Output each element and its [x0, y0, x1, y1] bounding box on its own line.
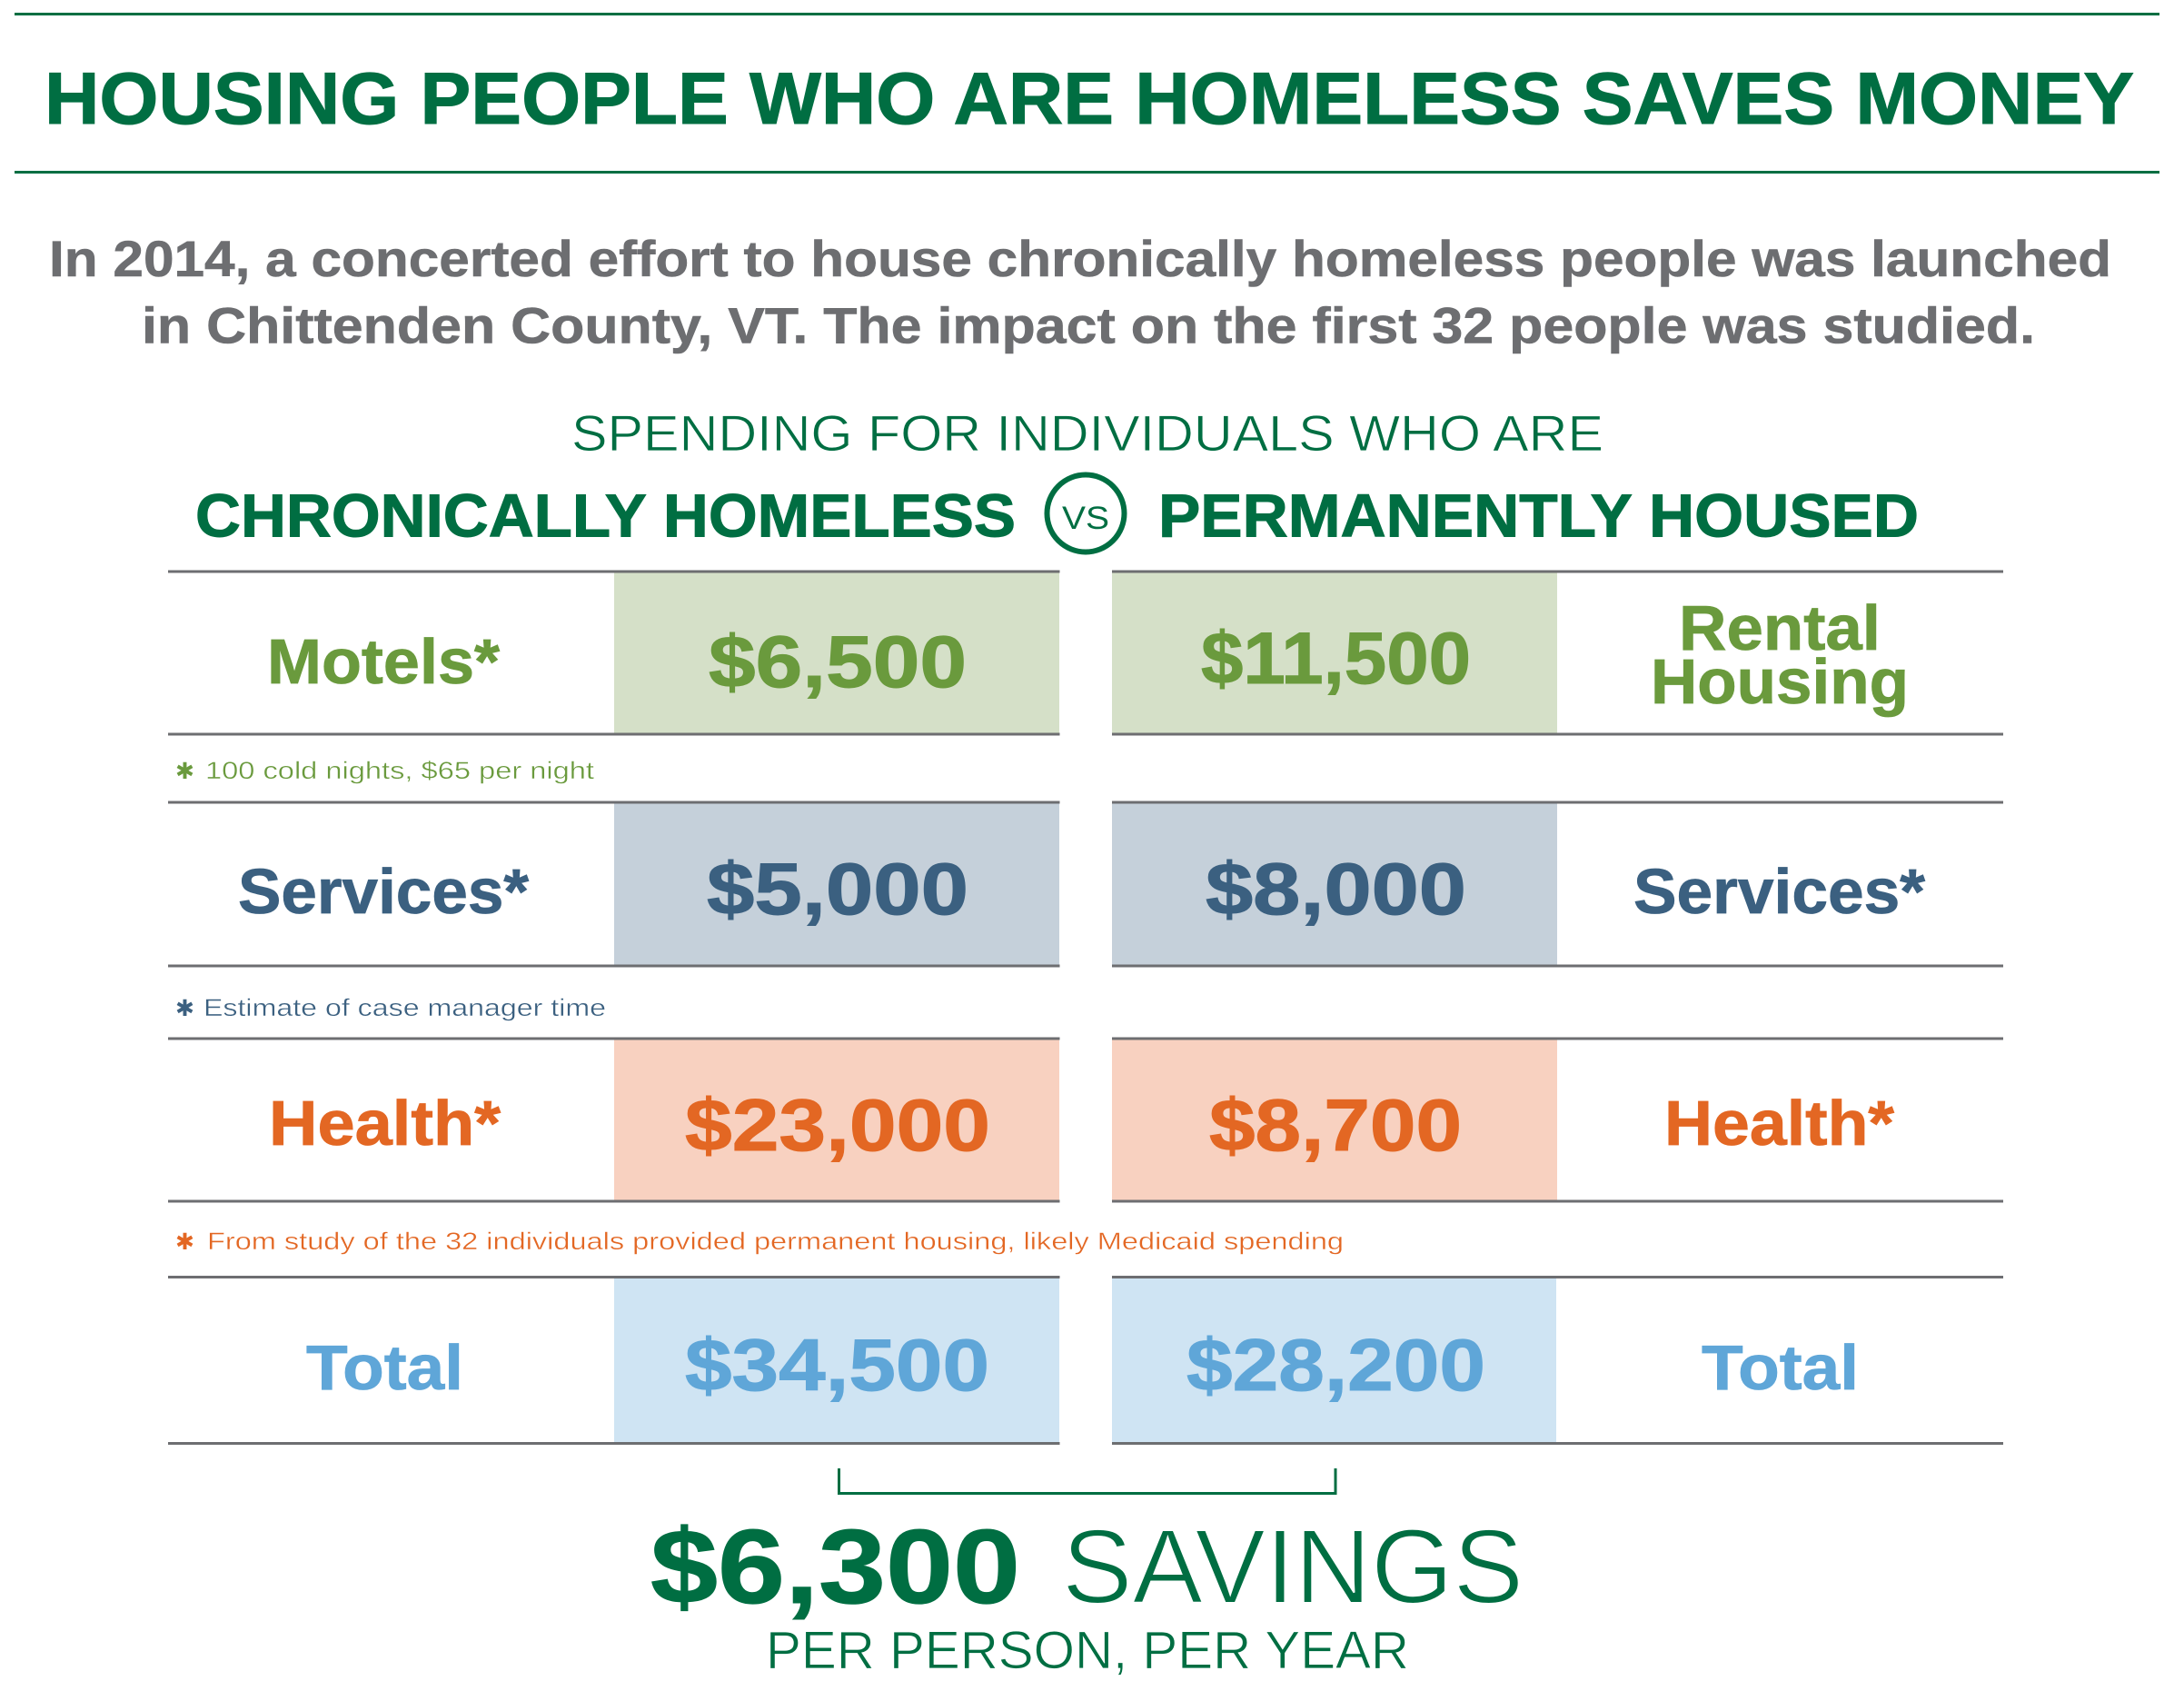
row: motels and rental housing	[168, 572, 2003, 734]
row: health: $8,700	[1209, 1085, 1462, 1167]
row: motels and rental housing: Housing	[1651, 646, 1909, 717]
row: services: $5,000	[707, 849, 968, 930]
intro text: In 2014, a concerted effort to house chronically homeless people was launched	[49, 230, 2111, 287]
footnote: services: ✱	[175, 995, 194, 1021]
row: total: Total	[1702, 1332, 1859, 1403]
footnote: services: Estimate of case manager time	[204, 994, 606, 1021]
row: total: $34,500	[685, 1325, 989, 1407]
row: health: $23,000	[685, 1085, 990, 1167]
intro text	[49, 230, 2111, 354]
row: total	[168, 1277, 2003, 1443]
footnote: motels: 100 cold nights, $65 per night	[205, 757, 595, 784]
row: motels and rental housing: Rental	[1679, 592, 1881, 663]
row: health: Health*	[269, 1088, 501, 1159]
row: motels and rental housing: $11,500	[1201, 618, 1471, 700]
savings callout: SAVINGS	[1062, 1507, 1524, 1626]
row: services: $8,000	[1206, 849, 1466, 930]
title block: HOUSING PEOPLE WHO ARE HOMELESS SAVES MONEY	[45, 58, 2134, 140]
comparison heading: PERMANENTLY HOUSED	[1158, 482, 1919, 551]
savings callout	[650, 1507, 1524, 1680]
footnote: motels: ✱	[175, 758, 194, 784]
comparison heading: CHRONICALLY HOMELESS	[195, 482, 1016, 551]
comparison heading: VS	[1062, 501, 1109, 536]
bracket connecting totals	[839, 1468, 1335, 1494]
comparison heading	[195, 404, 1919, 552]
comparison heading: SPENDING FOR INDIVIDUALS WHO ARE	[571, 404, 1603, 462]
row: services	[168, 802, 2003, 966]
row: health: Health*	[1664, 1088, 1895, 1159]
savings callout: $6,300	[650, 1507, 1020, 1626]
row: services: Services*	[1633, 856, 1926, 927]
row: motels and rental housing: $6,500	[709, 622, 967, 703]
savings callout: PER PERSON, PER YEAR	[766, 1621, 1409, 1680]
row: services: Services*	[238, 856, 530, 927]
footnote: health: ✱	[175, 1228, 194, 1255]
row: total: Total	[306, 1332, 463, 1403]
row: motels and rental housing: Motels*	[267, 626, 501, 697]
row: total: $28,200	[1186, 1325, 1485, 1407]
row: health	[168, 1039, 2003, 1201]
footnote: health: From study of the 32 individuals provided permanent housing, likely Medicaid spending	[207, 1228, 1344, 1255]
intro text: in Chittenden County, VT. The impact on the first 32 people was studied.	[142, 296, 2035, 354]
